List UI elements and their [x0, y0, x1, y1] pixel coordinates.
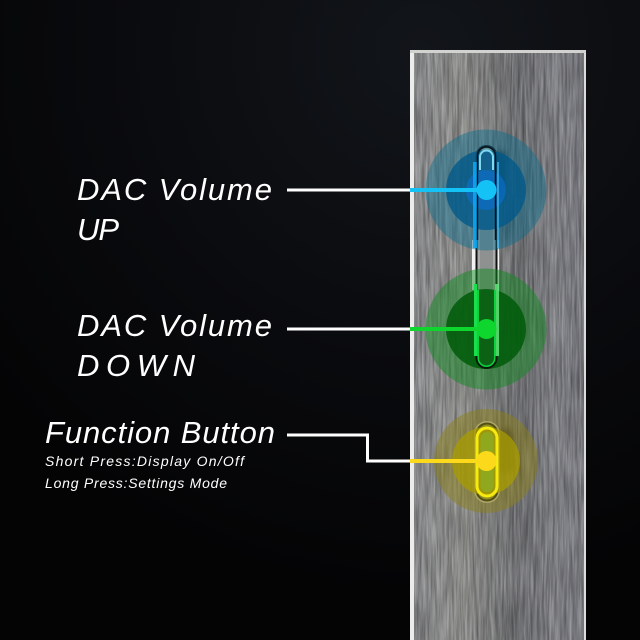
label: DAC Volume UP: DAC Volume [77, 172, 272, 207]
label: DAC Volume UP [77, 172, 272, 247]
label: DAC Volume DOWN: DOWN [77, 348, 196, 383]
volume rocker slot [472, 146, 508, 368]
green button highlight [426, 268, 546, 390]
label: Function Button: Short Press:Display On/Off [45, 453, 246, 469]
label: Function Button: Function Button [45, 415, 275, 450]
callout line: function button [287, 435, 496, 471]
blue button highlight [426, 130, 546, 250]
callout line: DAC volume down [287, 319, 496, 339]
callout line: DAC volume up [287, 180, 496, 200]
label: DAC Volume DOWN [77, 308, 272, 383]
function button slot [474, 421, 514, 503]
label: DAC Volume UP: UP [77, 212, 119, 247]
label: Function Button: Long Press:Settings Mode [45, 475, 227, 491]
panel: brushed metal device [410, 50, 586, 640]
yellow button highlight [434, 409, 538, 513]
label: Function Button [45, 415, 275, 491]
label: DAC Volume DOWN: DAC Volume [77, 308, 272, 343]
